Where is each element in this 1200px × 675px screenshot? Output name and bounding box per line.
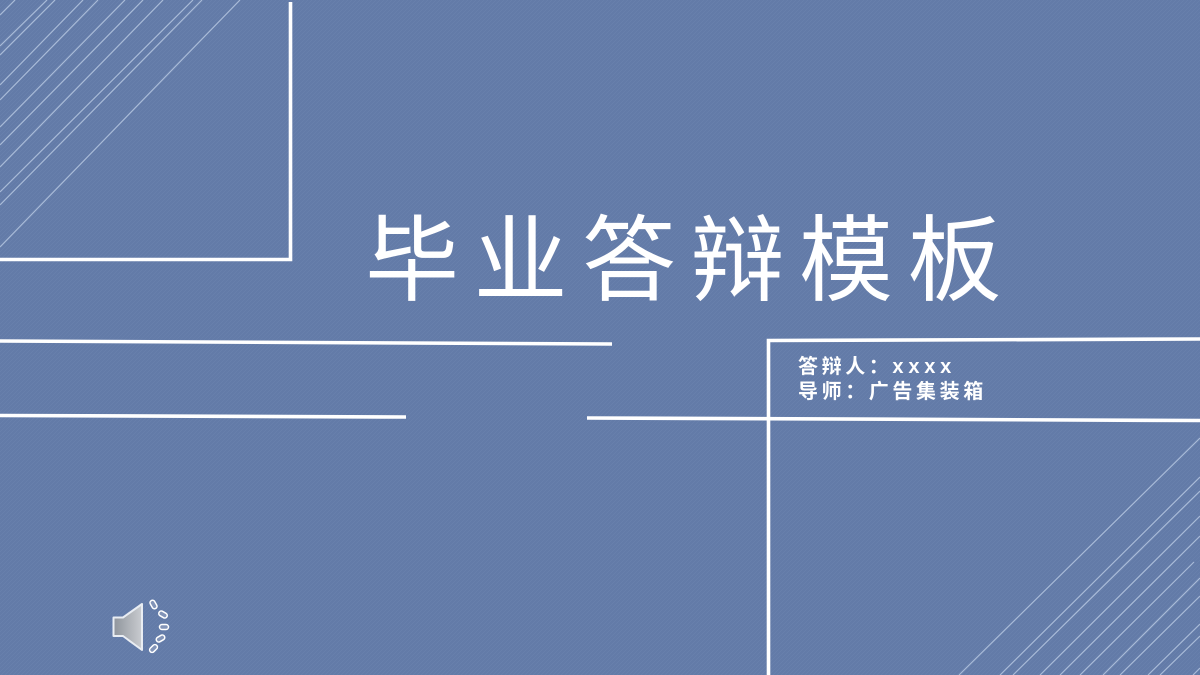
icon: speaker <box>112 600 170 654</box>
presenter and advisor text <box>798 356 987 403</box>
presenter: 答辩人：xxxx <box>798 356 956 378</box>
title: 毕业答辩模板 <box>365 208 1016 313</box>
advisor: 导师：广告集装箱 <box>798 381 987 403</box>
